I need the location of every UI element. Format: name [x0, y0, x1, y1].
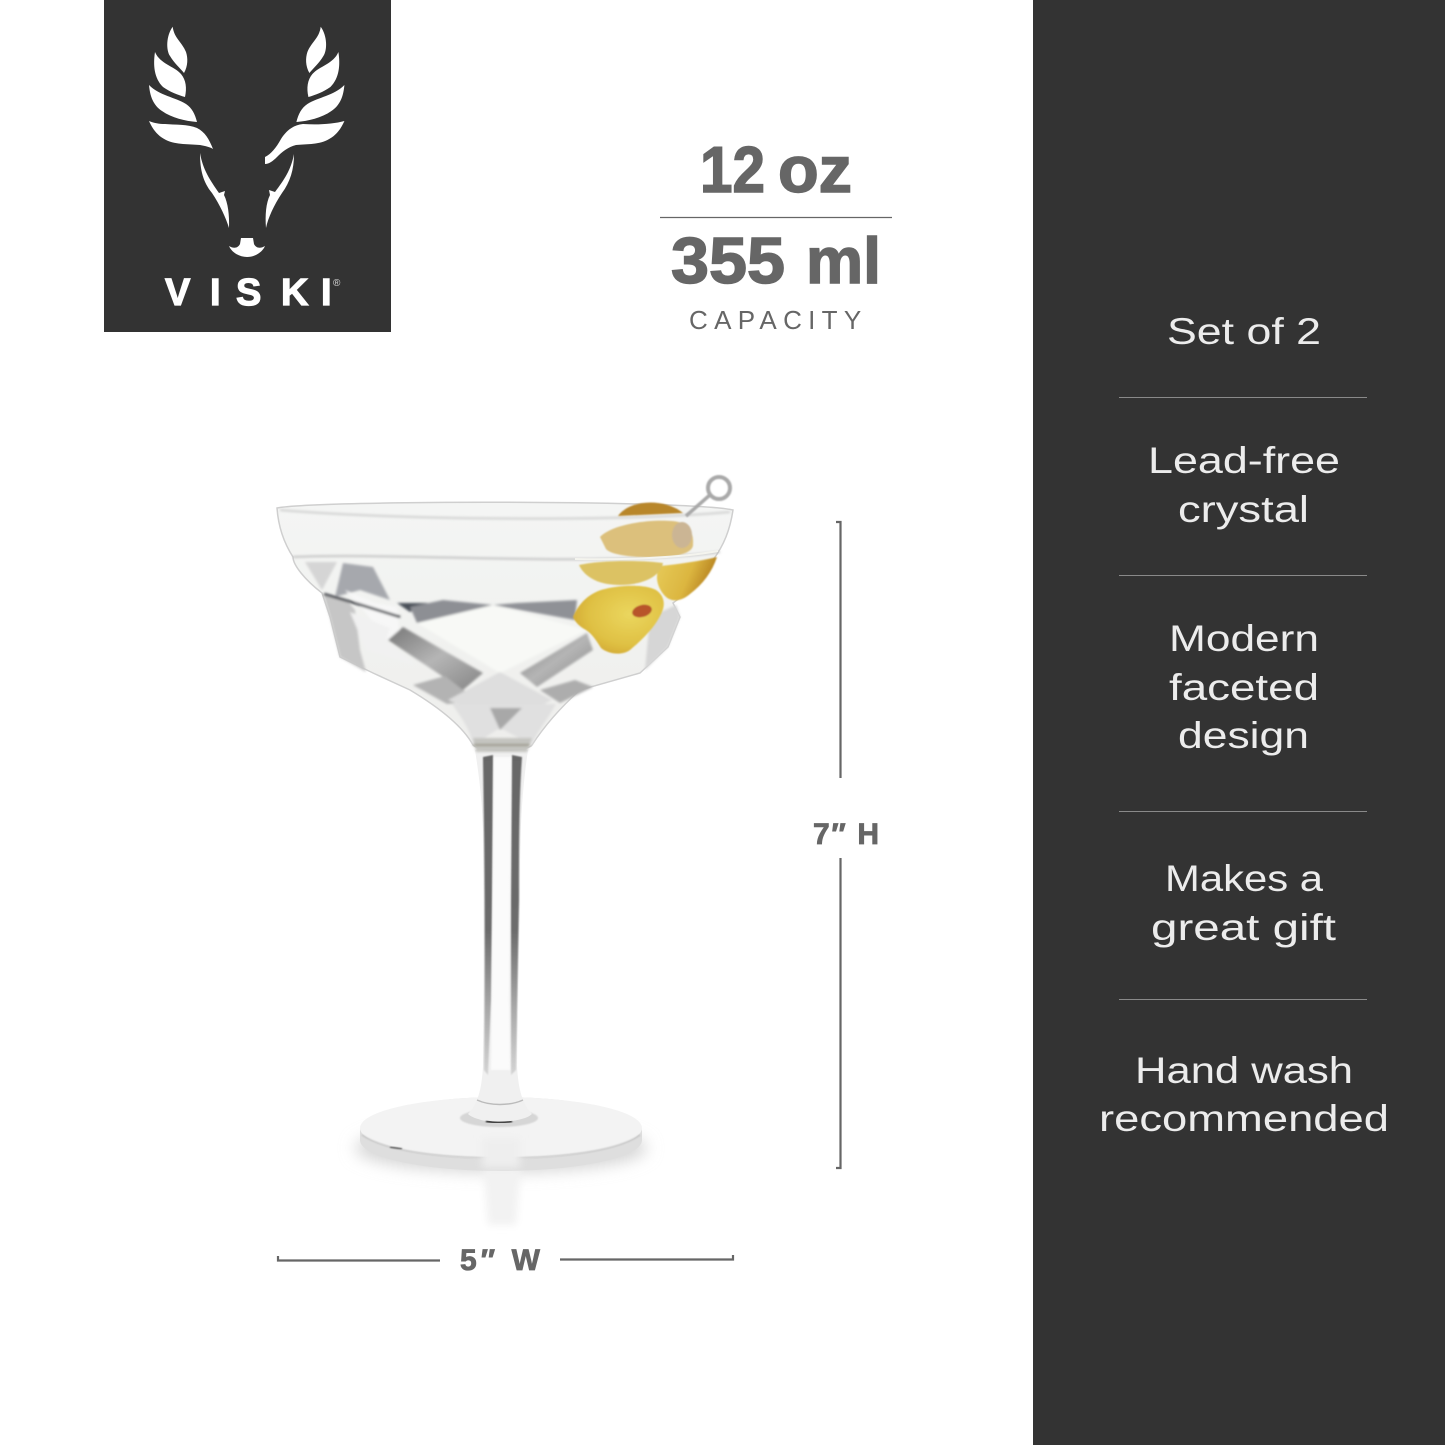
wordmark: VISKI	[165, 272, 332, 314]
feature: hand wash recommended	[1099, 1050, 1389, 1139]
capacity: millilitres: 355	[671, 224, 785, 297]
panel: features sidebar	[1033, 0, 1445, 1445]
feature: lead-free crystal: Lead-free	[1148, 440, 1340, 481]
cocktail pick	[686, 477, 730, 516]
stem: left dark band	[483, 755, 493, 1075]
stem: centre highlight	[491, 757, 511, 1070]
feature: makes a great gift: Makes a	[1165, 858, 1323, 899]
feature: makes a great gift: great gift	[1151, 907, 1337, 948]
olive: upper end cap	[672, 522, 692, 548]
feature: lead-free crystal	[1148, 440, 1340, 530]
olive: back right	[657, 557, 717, 600]
width dimension	[278, 1244, 733, 1277]
feature: modern faceted design	[1169, 618, 1319, 756]
feature: set of 2: Set of 2	[1167, 311, 1321, 352]
feature: makes a great gift	[1151, 858, 1337, 948]
feature: modern faceted design: Modern	[1169, 618, 1319, 659]
bowl facets	[280, 510, 730, 752]
logo: viski	[104, 0, 391, 332]
glass base	[360, 1097, 642, 1171]
registered mark: ®	[333, 278, 341, 289]
height label: 7″ H	[813, 818, 879, 851]
capacity: ounces: 12	[700, 133, 765, 206]
pimento	[631, 603, 653, 619]
glass bowl	[277, 502, 733, 750]
olive: upper	[600, 521, 693, 557]
capacity block	[660, 133, 892, 335]
olive: front	[573, 586, 664, 654]
capacity label: CAPACITY	[689, 305, 868, 335]
capacity: millilitres: ml	[806, 224, 881, 297]
capacity: ounces	[700, 133, 852, 206]
capacity: millilitres	[671, 224, 881, 297]
feature: modern faceted design: design	[1178, 715, 1309, 756]
base shadow and reflection	[355, 1124, 647, 1225]
feature: hand wash recommended: Hand wash	[1135, 1050, 1353, 1091]
feature: modern faceted design: faceted	[1169, 667, 1319, 708]
feature: hand wash recommended: recommended	[1099, 1098, 1389, 1139]
icon: antlers and nose	[149, 27, 344, 257]
liquid surface highlight	[575, 551, 718, 559]
olives and pick	[573, 477, 730, 654]
olive: middle	[579, 561, 663, 585]
glass photo	[277, 477, 733, 1225]
capacity: ounces: oz	[778, 133, 852, 206]
stem: right dark band	[511, 755, 522, 1075]
height dimension	[813, 522, 879, 1168]
olive: top	[618, 502, 683, 516]
glass stem	[468, 750, 532, 1122]
width label: 5″ W	[460, 1244, 541, 1277]
feature: lead-free crystal: crystal	[1178, 489, 1309, 530]
